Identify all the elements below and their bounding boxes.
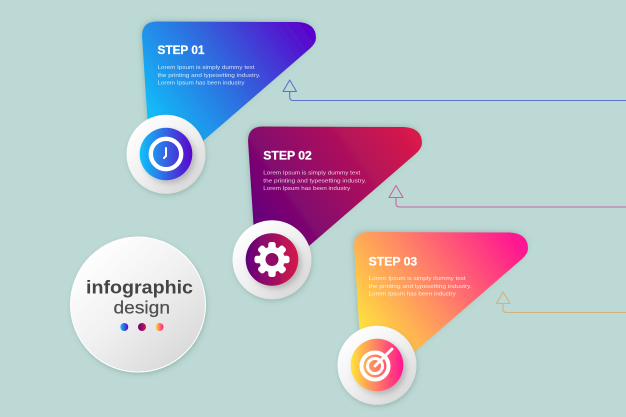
panel: infographic design badge: [70, 237, 206, 372]
icon badge: gear: [232, 220, 312, 299]
step 2 body text: the printing and typesetting industry.: [263, 178, 367, 184]
triangle card 3: [354, 232, 528, 360]
icon badge: clock: [126, 115, 206, 194]
badge circle: [70, 237, 206, 372]
panel: step 2: [232, 126, 422, 299]
step 1 body text: the printing and typesetting industry.: [158, 73, 261, 79]
triangle card 1: [142, 22, 316, 150]
step 1 body text: Lorem Ipsum has been industry: [158, 81, 245, 87]
connector arrow: step 3: [496, 292, 626, 312]
step 3 body text: the printing and typesetting industry.: [369, 284, 472, 290]
connector arrow: step 2: [389, 186, 626, 207]
step 1 body text: [158, 65, 261, 87]
step 1 heading: STEP 01: [158, 45, 205, 57]
connector arrow: step 1: [283, 80, 626, 100]
step 3 body text: [369, 276, 472, 298]
step 3 heading: STEP 03: [369, 256, 417, 268]
step 2 heading: STEP 02: [263, 150, 312, 162]
step 2 body text: Lorem Ipsum is simply dummy text: [263, 170, 361, 176]
icon badge: target: [338, 326, 416, 405]
panel: step 3: [338, 232, 528, 405]
step 2 body text: Lorem Ipsum has been industry: [263, 186, 351, 192]
title: infographic: infographic: [86, 276, 193, 298]
subtitle: design: design: [114, 298, 170, 318]
colour dots: [120, 323, 164, 331]
step 3 body text: Lorem Ipsum is simply dummy text: [369, 276, 466, 282]
triangle card 2: [248, 126, 422, 255]
panel: step 1: [126, 22, 316, 194]
step 1 body text: Lorem Ipsum is simply dummy text: [158, 65, 255, 71]
step 3 body text: Lorem Ipsum has been industry: [369, 292, 456, 298]
step 2 body text: [263, 170, 367, 192]
